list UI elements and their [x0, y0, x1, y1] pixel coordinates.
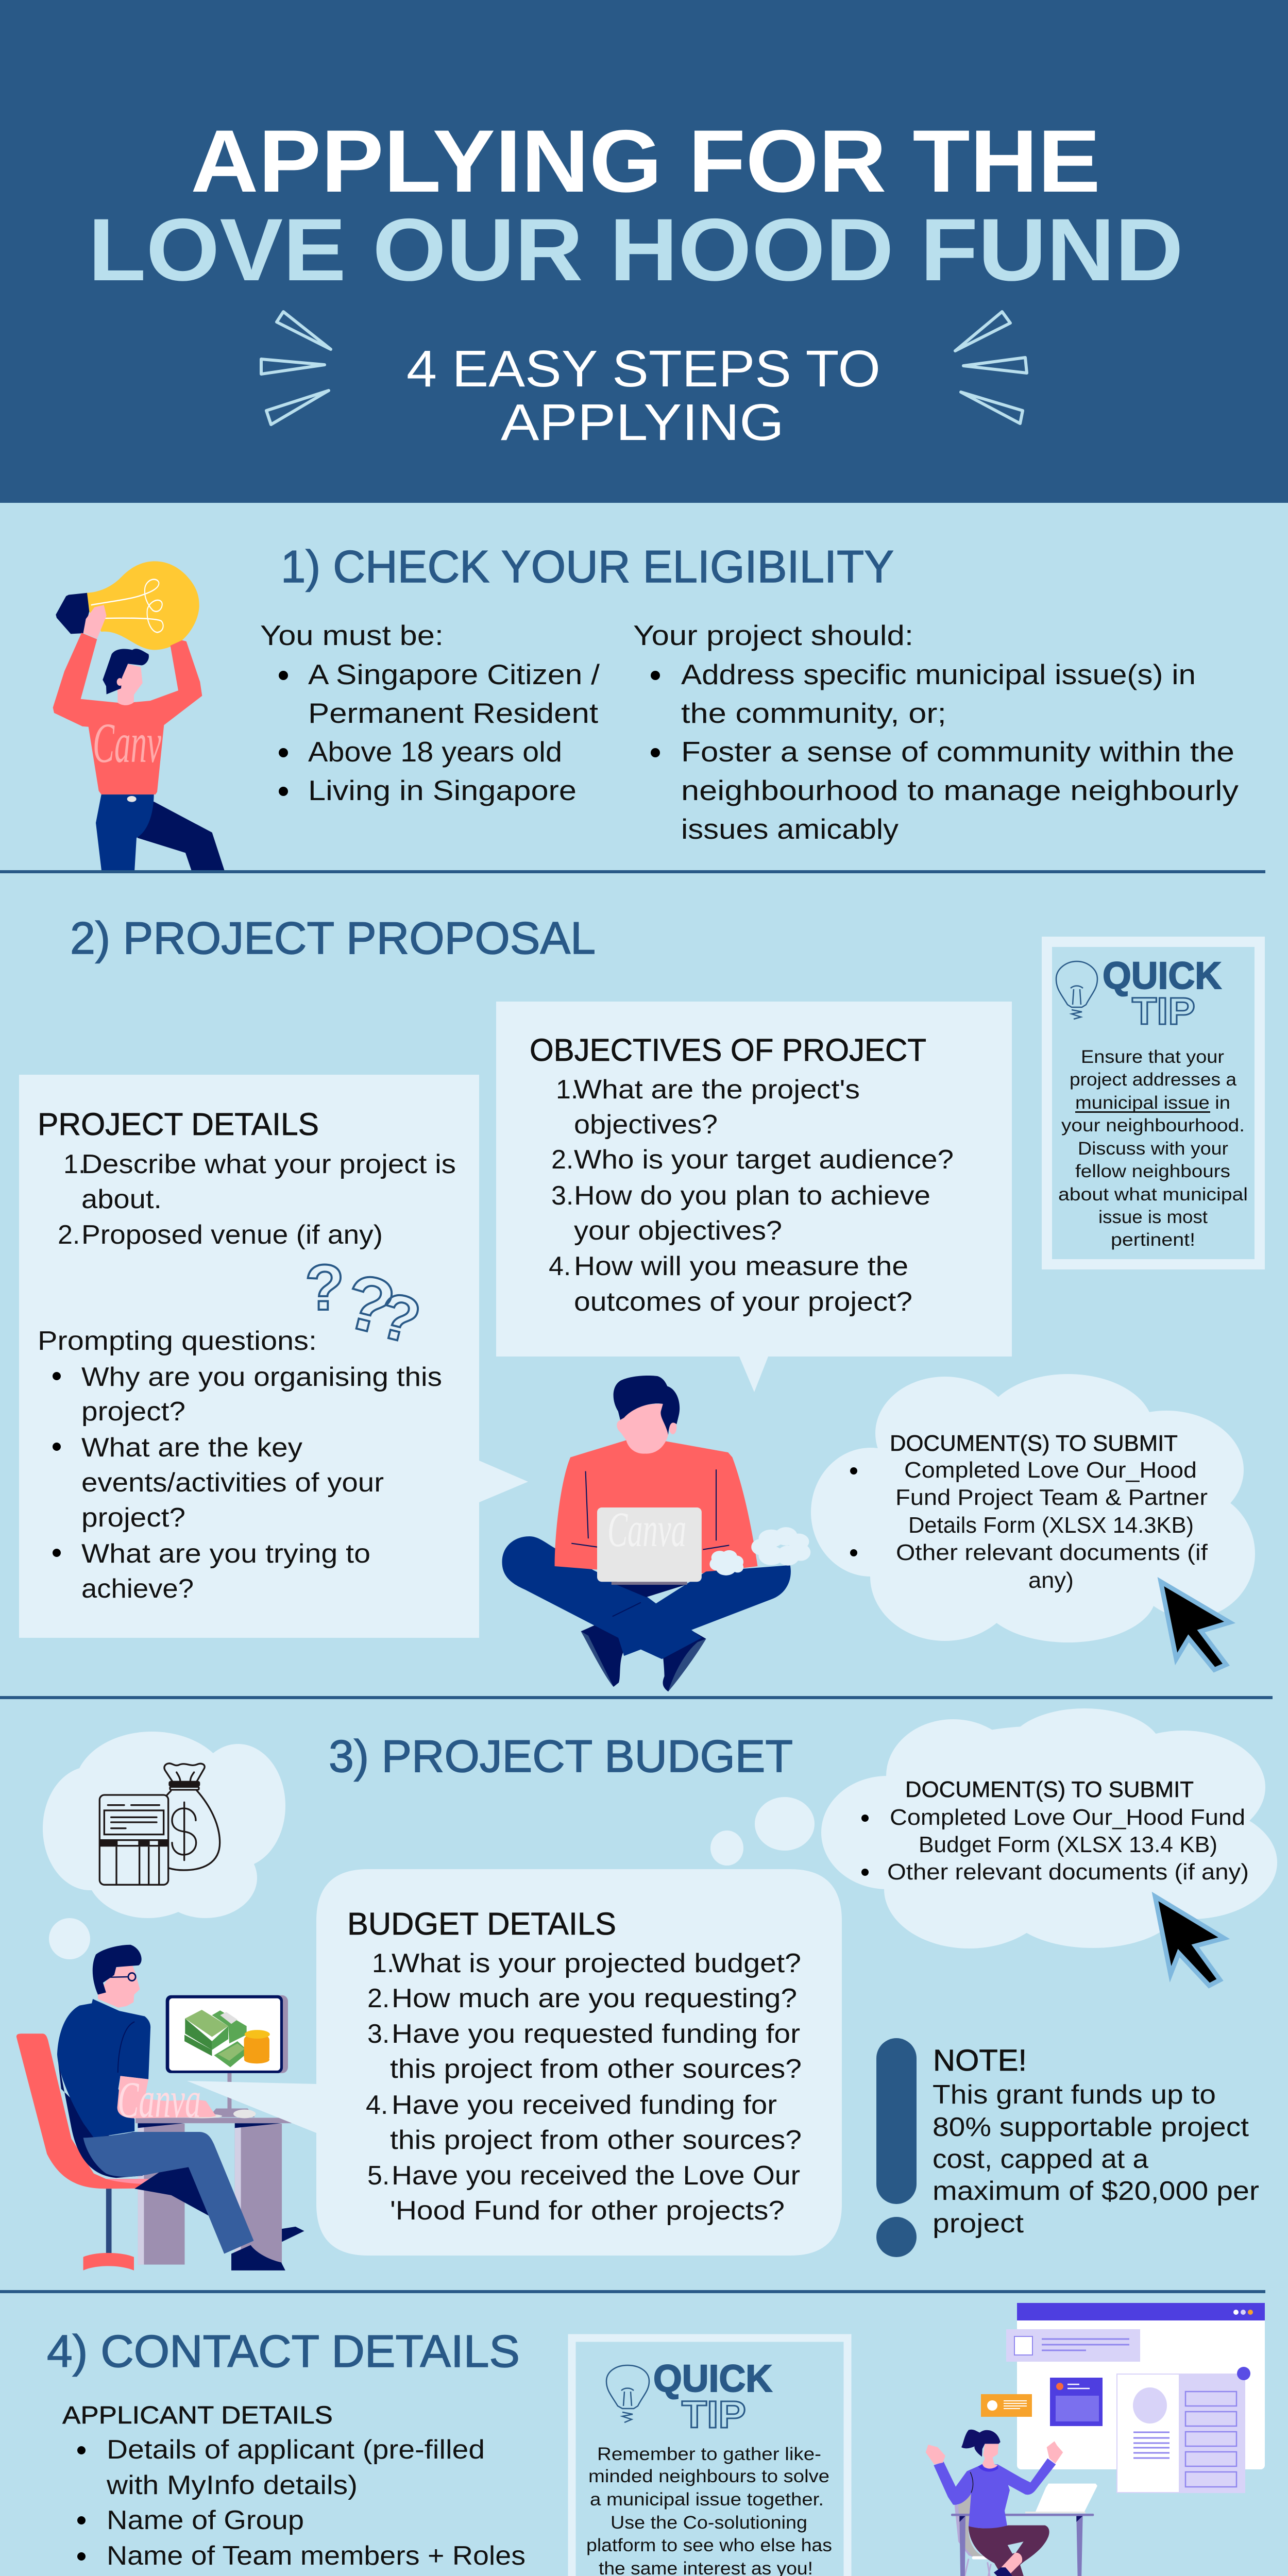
panel: objectives of project — [496, 1002, 1012, 1392]
icon: outline light bulb — [1056, 961, 1097, 1019]
callout: documents to submit cloud: DOCUMENT(S) TO SUBMIT — [905, 1777, 1194, 1802]
callout: documents to submit cloud: Details Form (XLSX 14.3KB) — [908, 1513, 1194, 1538]
heading: 1) CHECK YOUR ELIGIBILITY — [281, 541, 894, 592]
callout: quick tip: project addresses a — [1070, 1070, 1237, 1090]
illustration: man sitting cross-legged with laptop — [502, 1376, 810, 1691]
icon: burst rays left — [261, 312, 331, 425]
text block: you must be: Above 18 years old — [308, 736, 562, 768]
text block: you must be: Living in Singapore — [308, 774, 577, 806]
callout: documents to submit cloud: DOCUMENT(S) TO SUBMIT — [890, 1431, 1178, 1456]
illustration: man lifting light bulb — [53, 561, 225, 872]
callout: documents to submit cloud: any) — [1028, 1568, 1074, 1593]
callout: quick tip — [572, 2338, 848, 2576]
panel: objectives of project: How do you plan to achieve — [574, 1181, 930, 1211]
section 4: contact details — [47, 2303, 1265, 2576]
heading: 3) PROJECT BUDGET — [329, 1731, 793, 1782]
icon: question marks: ? — [336, 1257, 403, 1352]
callout: quick tip: fellow neighbours — [1075, 1161, 1230, 1181]
panel: objectives of project: 3. — [551, 1181, 573, 1211]
icon: burst rays right — [955, 312, 1027, 423]
callout: documents to submit cloud: Completed Love Our_Hood — [904, 1458, 1197, 1483]
callout: note: 80% supportable project — [933, 2112, 1249, 2142]
callout: note: maximum of $20,000 per — [933, 2176, 1259, 2206]
icon: cursor arrow — [1155, 1896, 1224, 1986]
callout: documents to submit cloud — [710, 1708, 1277, 1986]
callout: note: NOTE! — [933, 2044, 1027, 2077]
text block: your project should: neighbourhood to manage neighbourly — [681, 774, 1239, 806]
text block: your project should: Your project should: — [633, 619, 913, 651]
text block: applicant details: APPLICANT DETAILS — [62, 2402, 333, 2429]
panel: budget details: 'Hood Fund for other projects? — [390, 2196, 785, 2226]
callout: quick tip: Discuss with your — [1078, 1139, 1228, 1159]
subtitle: APPLYING — [501, 394, 784, 451]
panel: project details: PROJECT DETAILS — [38, 1107, 319, 1142]
section 3: project budget — [16, 1708, 1277, 2270]
panel: project details — [19, 1075, 528, 1638]
text block: applicant details: Name of Team members + Roles — [107, 2541, 526, 2571]
illustration: woman at standing desk — [926, 2430, 1097, 2576]
panel: project details: 2. — [58, 1220, 80, 1250]
panel: objectives of project: OBJECTIVES OF PROJECT — [530, 1032, 926, 1067]
panel: objectives of project: Who is your target audience? — [574, 1145, 954, 1175]
callout: quick tip: TIP — [1132, 990, 1195, 1032]
panel: project details: 1. — [63, 1149, 86, 1179]
callout: quick tip: a municipal issue together. — [590, 2489, 824, 2510]
callout: note: cost, capped at a — [933, 2144, 1148, 2174]
text block: you must be: You must be: — [260, 619, 444, 651]
panel: budget details: Have you requested funding for — [392, 2019, 800, 2049]
callout: quick tip: Ensure that your — [1081, 1047, 1224, 1067]
panel: objectives of project: How will you measure the — [574, 1251, 908, 1281]
heading: 2) PROJECT PROPOSAL — [70, 912, 596, 963]
text block: your project should — [633, 619, 1239, 845]
panel: project details: What are the key — [81, 1433, 302, 1463]
callout: quick tip: Use the Co-solutioning — [611, 2513, 807, 2533]
illustration: man at desk with monitor — [16, 1945, 304, 2270]
panel: budget details: 2. — [367, 1984, 389, 2013]
icon: cursor arrow — [1161, 1582, 1230, 1670]
section 2: project proposal — [19, 912, 1260, 1691]
title: APPLYING FOR THE — [191, 112, 1100, 211]
panel: budget details: 5. — [367, 2161, 389, 2191]
callout: quick tip: platform to see who else has — [586, 2535, 832, 2555]
panel: project details: Describe what your project is — [81, 1149, 456, 1179]
text block: your project should: the community, or; — [681, 697, 946, 729]
icon: question marks: ? — [371, 1279, 427, 1358]
illustration: man at desk with monitor: Canva — [117, 2071, 201, 2128]
text block: you must be: Permanent Resident — [308, 697, 598, 729]
illustration: web browser window — [981, 2303, 1265, 2493]
text block: applicant details: with MyInfo details) — [106, 2470, 358, 2500]
callout: quick tip — [1047, 942, 1260, 1264]
panel: objectives of project: 4. — [549, 1251, 571, 1281]
panel: project details: Proposed venue (if any) — [81, 1220, 383, 1250]
panel: project details: events/activities of your — [81, 1468, 384, 1498]
icon: hand clouds — [709, 1527, 810, 1575]
panel: budget details: 4. — [366, 2090, 388, 2120]
panel: project details: about. — [81, 1184, 162, 1214]
panel: project details: project? — [81, 1397, 185, 1427]
panel: project details: achieve? — [81, 1574, 194, 1604]
panel: budget details: Have you received the Love Our — [392, 2161, 800, 2191]
text block: your project should: Foster a sense of community within the — [681, 736, 1234, 768]
callout: quick tip: your neighbourhood. — [1061, 1115, 1245, 1136]
panel: budget details: this project from other sources? — [390, 2054, 802, 2084]
panel: budget details: How much are you requesting? — [392, 1984, 797, 2013]
illustration: man sitting cross-legged with laptop: Canva — [607, 1502, 686, 1557]
panel: objectives of project: objectives? — [574, 1110, 718, 1140]
callout: quick tip: municipal issue in — [1075, 1093, 1230, 1113]
panel: objectives of project: What are the project's — [574, 1075, 860, 1105]
icon: exclamation mark — [876, 2038, 917, 2257]
icon: outline light bulb — [606, 2365, 649, 2422]
title: LOVE OUR HOOD FUND — [88, 200, 1183, 299]
callout: quick tip: Remember to gather like- — [597, 2444, 821, 2464]
header banner — [0, 0, 1288, 503]
panel: objectives of project: outcomes of your project? — [574, 1287, 912, 1317]
panel: project details: project? — [81, 1503, 185, 1533]
callout: quick tip: minded neighbours to solve — [588, 2466, 829, 2486]
heading: 4) CONTACT DETAILS — [47, 2326, 520, 2377]
panel: budget details: 3. — [367, 2019, 389, 2049]
subtitle: 4 EASY STEPS TO — [406, 340, 880, 398]
callout: quick tip: about what municipal — [1058, 1184, 1248, 1205]
panel: budget details: What is your projected budget? — [392, 1948, 801, 1978]
callout: documents to submit cloud: Budget Form (XLSX 13.4 KB) — [919, 1832, 1217, 1857]
subtitle — [406, 340, 880, 451]
callout: note — [876, 2038, 1259, 2257]
callout: quick tip: pertinent! — [1111, 1230, 1195, 1250]
panel: project details: Why are you organising this — [81, 1362, 442, 1392]
callout: note: This grant funds up to — [933, 2080, 1216, 2110]
callout: documents to submit cloud — [811, 1374, 1255, 1670]
icon: monitor with money — [166, 1995, 288, 2073]
panel: objectives of project: your objectives? — [574, 1216, 782, 1246]
title — [88, 112, 1183, 299]
panel: objectives of project: 1. — [556, 1075, 578, 1105]
panel: budget details: BUDGET DETAILS — [347, 1906, 616, 1941]
callout: quick tip: QUICK — [653, 2357, 772, 2400]
text block: applicant details: Details of applicant (pre-filled — [107, 2435, 485, 2465]
panel: budget details: Have you received funding for — [392, 2090, 777, 2120]
panel: budget details — [187, 1869, 842, 2256]
icon: money bag and ledger — [99, 1764, 220, 1885]
callout: quick tip: issue is most — [1098, 1207, 1208, 1227]
callout: quick tip: QUICK — [1103, 954, 1222, 997]
callout: documents to submit cloud: Other relevant documents (if — [896, 1540, 1208, 1565]
callout: quick tip: TIP — [682, 2393, 746, 2436]
callout: documents to submit cloud: Fund Project Team & Partner — [895, 1485, 1208, 1510]
callout: documents to submit cloud: Completed Love Our_Hood Fund — [890, 1805, 1245, 1830]
text block: you must be — [260, 619, 600, 806]
text block: your project should: Address specific municipal issue(s) in — [681, 658, 1196, 690]
icon: question marks: ? — [305, 1252, 344, 1324]
section 1: check your eligibility — [53, 541, 1239, 872]
panel: objectives of project: 2. — [551, 1145, 573, 1175]
panel: project details: What are you trying to — [81, 1539, 370, 1569]
panel: project details: Prompting questions: — [38, 1326, 317, 1356]
text block: applicant details: Name of Group — [107, 2505, 304, 2535]
panel: budget details: 1. — [372, 1948, 394, 1978]
panel: budget details: this project from other sources? — [390, 2125, 802, 2155]
callout: documents to submit cloud: Other relevant documents (if any) — [887, 1859, 1249, 1885]
text block: your project should: issues amicably — [681, 813, 899, 845]
callout: note: project — [933, 2209, 1024, 2239]
text block: applicant details — [62, 2402, 526, 2571]
icon: question marks — [305, 1252, 427, 1358]
illustration: man lifting light bulb: Canv — [93, 711, 161, 774]
text block: you must be: A Singapore Citizen / — [308, 658, 600, 690]
thought cloud: money — [43, 1732, 285, 1959]
